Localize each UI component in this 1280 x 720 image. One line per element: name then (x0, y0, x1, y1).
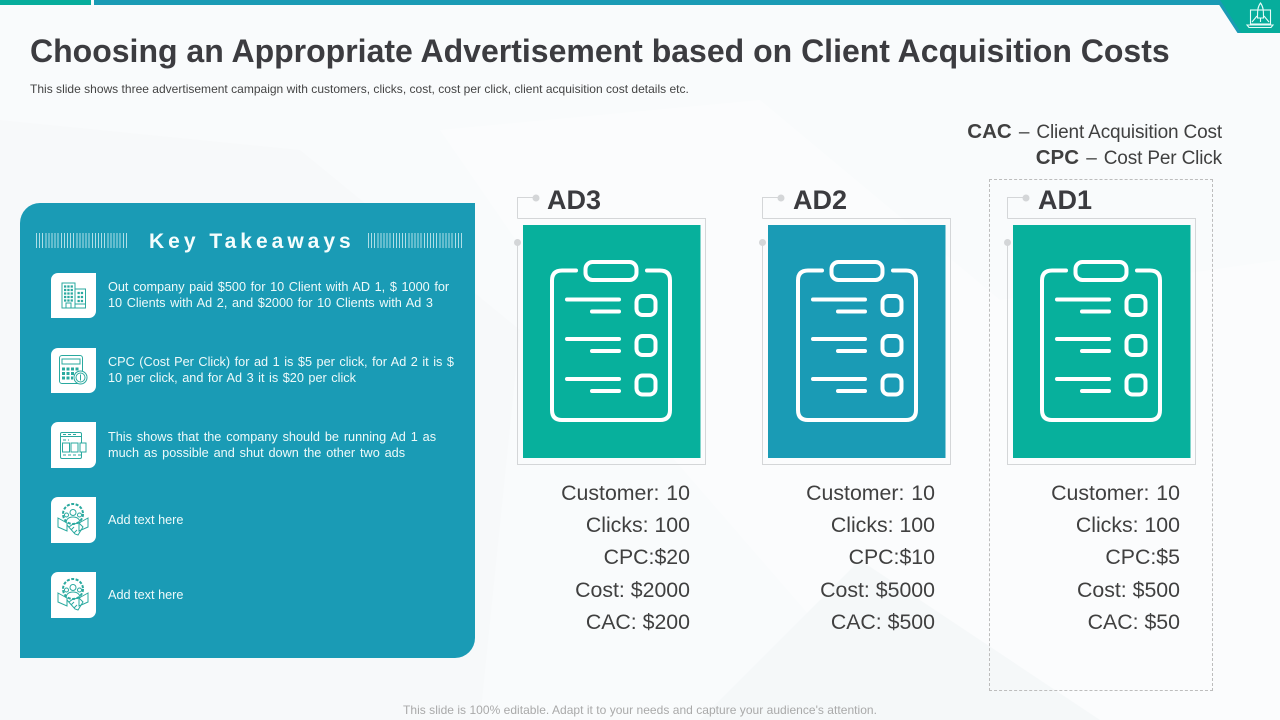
icon: web layout (51, 422, 96, 468)
AD2 values: CPC:$10 (849, 545, 935, 569)
AD1 values: CAC: $50 (1088, 610, 1180, 634)
top accent bar (0, 0, 1280, 33)
text: takeaway 2: 10 per click, and for Ad 3 it is $20 per click (108, 371, 356, 385)
panel: AD2 (759, 185, 951, 634)
AD1 heading: AD1 (1038, 185, 1092, 215)
AD3 values (561, 481, 690, 634)
hatch decoration right (368, 233, 462, 248)
abbreviation legend: CAC – Client Acquisition Cost (967, 120, 1222, 143)
text: takeaway 5: Add text here (108, 588, 183, 602)
text: takeaway 3: much as possible and shut down the other two ads (108, 446, 405, 460)
panel: key takeaways (20, 203, 475, 658)
highlight: AD1 dashed box (989, 179, 1213, 691)
AD2 values: Clicks: 100 (831, 513, 935, 537)
text: takeaway 3: This shows that the company should be running Ad 1 as (108, 430, 436, 444)
AD3 values: Clicks: 100 (586, 513, 690, 537)
AD1 values (1051, 481, 1180, 634)
AD2 values: Cost: $5000 (820, 578, 935, 602)
abbreviation legend (967, 120, 1222, 169)
icon: office building (51, 273, 96, 318)
icon: calculator (51, 348, 96, 393)
footer note: This slide is 100% editable. Adapt it to your needs and capture your audience's attention. (403, 703, 877, 717)
AD3 heading: AD3 (547, 185, 601, 215)
abbreviation legend: CPC – Cost Per Click (1036, 146, 1222, 169)
subtitle: This slide shows three advertisement campaign with customers, clicks, cost, cost per click, client acquisition cost details etc. (30, 82, 689, 96)
title: Choosing an Appropriate Advertisement based on Client Acquisition Costs (30, 33, 1170, 69)
icon: team handshake (51, 497, 96, 543)
text: takeaway 2: CPC (Cost Per Click) for ad 1 is $5 per click, for Ad 2 it is $ (108, 355, 454, 369)
AD2 heading: AD2 (793, 185, 847, 215)
corner tab with icon (1219, 0, 1280, 33)
panel: AD1 (1004, 185, 1196, 634)
AD3 values: CPC:$20 (604, 545, 690, 569)
AD3 values: Customer: 10 (561, 481, 690, 505)
heading: key takeaways: Key Takeaways (149, 230, 355, 253)
hatch decoration left (36, 233, 127, 248)
AD2 values (806, 481, 935, 634)
AD1 values: Clicks: 100 (1076, 513, 1180, 537)
AD1 frame and icon (1004, 194, 1196, 465)
panel: AD3 (514, 185, 706, 634)
text: takeaway 2 (108, 355, 454, 385)
AD2 values: Customer: 10 (806, 481, 935, 505)
text: takeaway 1: 10 Clients with Ad 2, and $2000 for 10 Clients with Ad 3 (108, 296, 433, 310)
AD2 values: CAC: $500 (831, 610, 935, 634)
AD1 values: CPC:$5 (1105, 545, 1180, 569)
text: takeaway 1 (108, 280, 449, 310)
AD3 values: Cost: $2000 (575, 578, 690, 602)
AD2 frame and icon (759, 194, 951, 465)
text: takeaway 1: Out company paid $500 for 10 Client with AD 1, $ 1000 for (108, 280, 449, 294)
AD1 values: Cost: $500 (1077, 578, 1180, 602)
AD3 frame and icon (514, 194, 706, 465)
icon: team handshake (51, 572, 96, 618)
text: takeaway 4: Add text here (108, 513, 183, 527)
AD1 values: Customer: 10 (1051, 481, 1180, 505)
text: takeaway 3 (108, 430, 436, 460)
AD3 values: CAC: $200 (586, 610, 690, 634)
